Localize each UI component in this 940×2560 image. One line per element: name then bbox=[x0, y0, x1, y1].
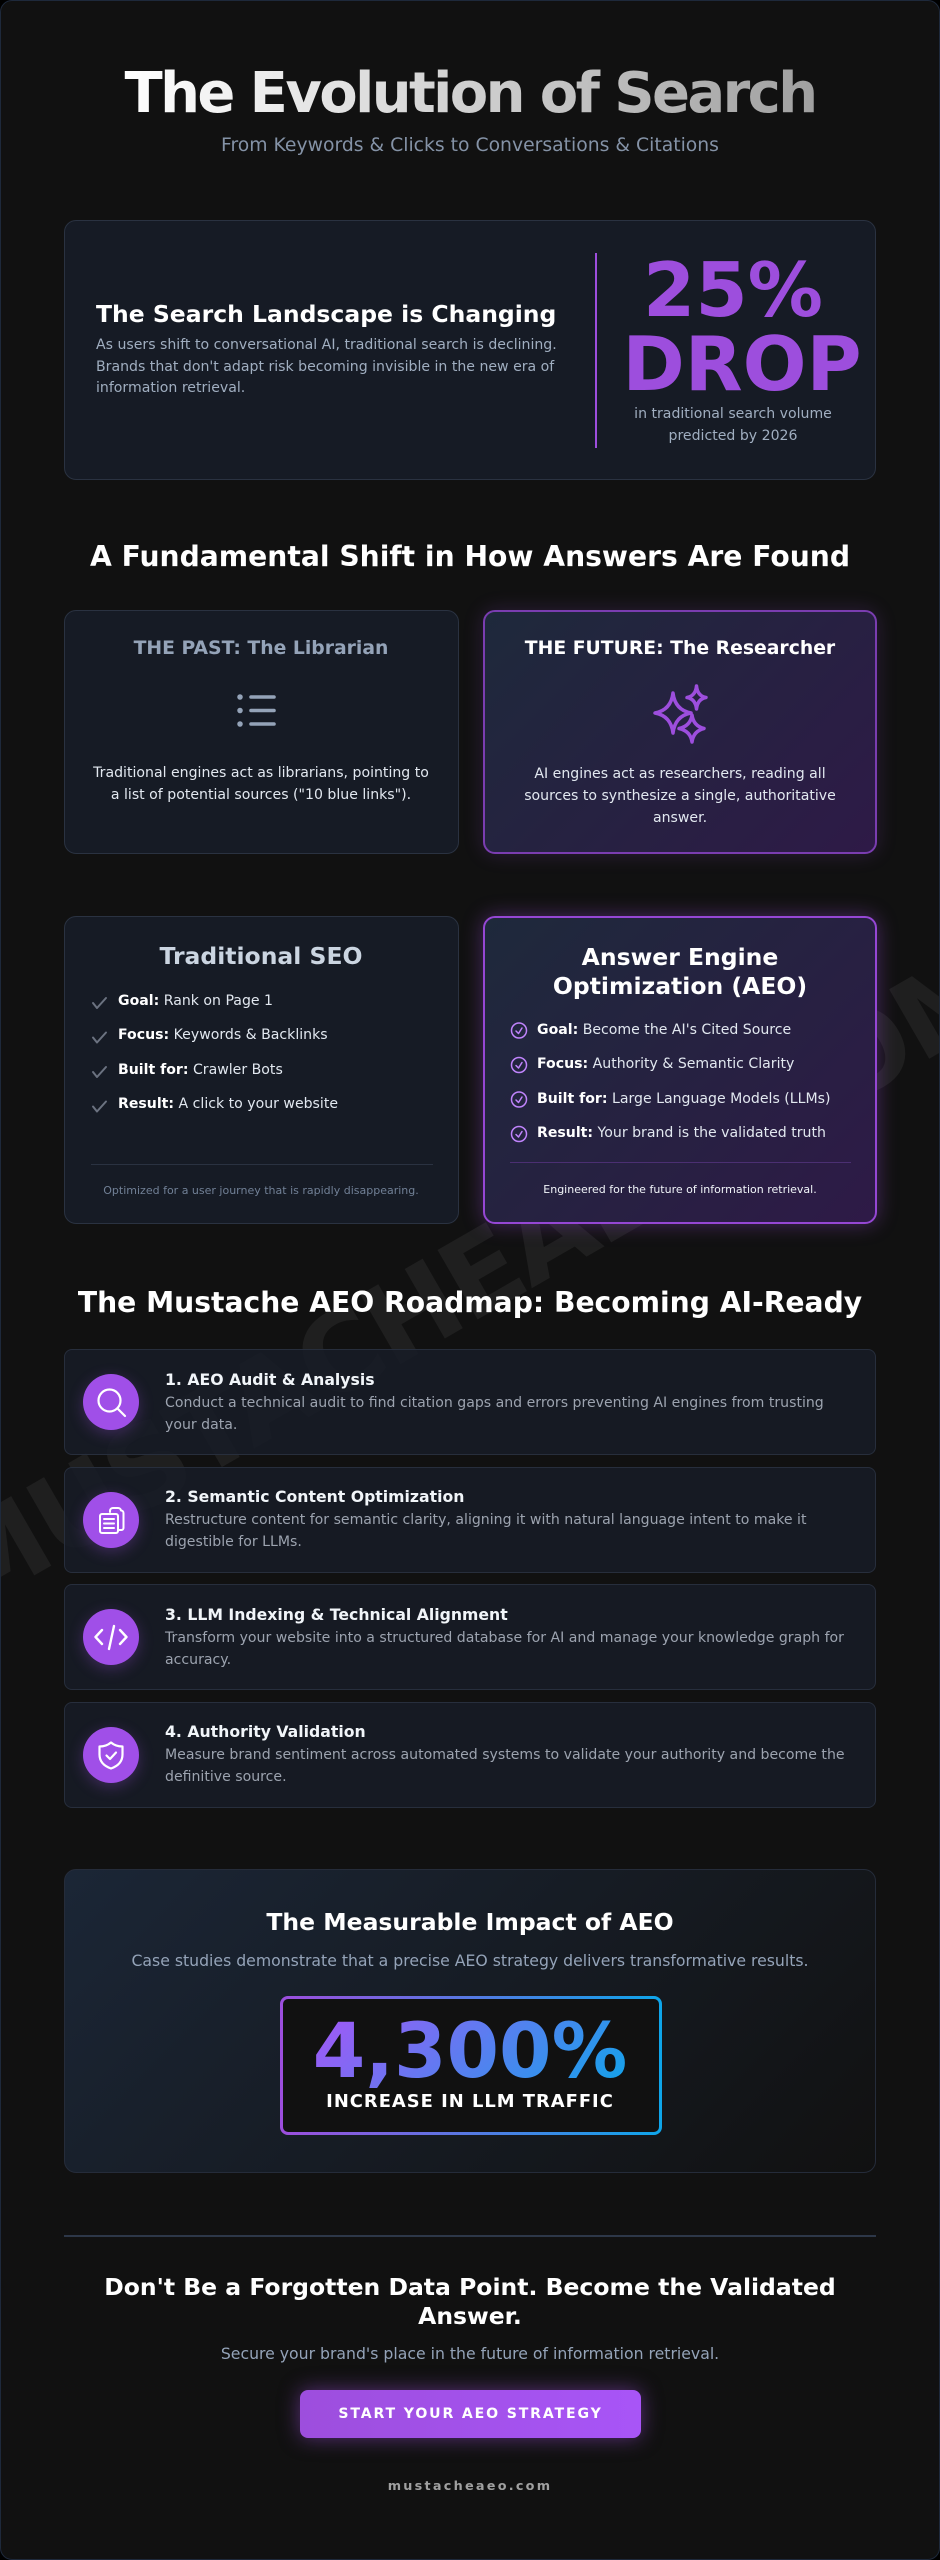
text: step 3 description: Transform your website into a structured database for AI and manage your knowledge graph for bbox=[165, 1630, 844, 1646]
divider line bbox=[91, 1164, 433, 1165]
text: past: Traditional engines act as librarians, pointing to bbox=[93, 765, 429, 781]
list: AEO points bbox=[510, 1022, 830, 1142]
divider line bbox=[510, 1162, 851, 1163]
stat label: INCREASE IN LLM TRAFFIC bbox=[326, 2091, 614, 2112]
stat: 4,300%: 4,300% bbox=[313, 2007, 627, 2095]
icon: code bbox=[83, 1609, 139, 1665]
panel: roadmap step 1 bbox=[64, 1349, 876, 1455]
text: step 2 description: Restructure content for semantic clarity, aligning it with natural language intent to make it bbox=[165, 1512, 806, 1528]
text: step 4 description: definitive source. bbox=[165, 1769, 287, 1785]
text: future: AI engines act as researchers, reading all bbox=[534, 766, 826, 782]
stat caption: in traditional search volume bbox=[634, 406, 832, 422]
text: step 1 description: your data. bbox=[165, 1417, 237, 1433]
panel: the past bbox=[64, 610, 459, 854]
text: AEO footer: Engineered for the future of information retrieval. bbox=[543, 1183, 817, 1196]
button: START YOUR AEO STRATEGY bbox=[338, 2406, 603, 2422]
list: SEO points: Goal: Rank on Page 1 bbox=[118, 993, 273, 1009]
icon: shield bbox=[83, 1727, 139, 1783]
heading: traditional SEO: Traditional SEO bbox=[160, 942, 362, 970]
list: SEO points: Focus: Keywords & Backlinks bbox=[118, 1027, 328, 1043]
stat: DROP: DROP bbox=[622, 320, 862, 408]
icon: sparkles bbox=[653, 684, 708, 744]
text: past bbox=[93, 765, 429, 803]
stat: 25%: 25% bbox=[643, 246, 823, 334]
heading: AEO: Answer Engine bbox=[582, 943, 778, 971]
text: step 2 description: digestible for LLMs. bbox=[165, 1534, 302, 1550]
text: step 3 description bbox=[164, 1630, 844, 1668]
stat caption: predicted by 2026 bbox=[668, 428, 797, 444]
text: landscape body: Brands that don't adapt risk becoming invisible in the new era of bbox=[96, 359, 554, 375]
text: step 3 description: accuracy. bbox=[165, 1652, 231, 1668]
list: AEO points: Focus: Authority & Semantic Clarity bbox=[537, 1056, 794, 1072]
subtitle: From Keywords & Clicks to Conversations & Citations bbox=[221, 135, 719, 156]
heading: past: THE PAST: The Librarian bbox=[134, 638, 388, 659]
text: step 1 title: 1. AEO Audit & Analysis bbox=[165, 1370, 375, 1389]
heading: roadmap: The Mustache AEO Roadmap: Becoming AI-Ready bbox=[78, 1286, 862, 1319]
panel: roadmap step 3 bbox=[64, 1584, 876, 1690]
heading: call to action bbox=[104, 2273, 836, 2330]
heading: impact: The Measurable Impact of AEO bbox=[266, 1908, 674, 1936]
text: step 1 description bbox=[165, 1395, 824, 1433]
text: step 4 title: 4. Authority Validation bbox=[165, 1722, 366, 1741]
text: step 1 description: Conduct a technical audit to find citation gaps and errors preventing AI engines from trusting bbox=[165, 1395, 824, 1411]
button bbox=[300, 2390, 641, 2438]
panel: the future bbox=[483, 610, 877, 854]
list: AEO points: Built for: Large Language Models (LLMs) bbox=[537, 1091, 830, 1107]
title: The Evolution of Search bbox=[125, 61, 815, 126]
heading: fundamental shift: A Fundamental Shift in How Answers Are Found bbox=[90, 540, 850, 573]
icon: clipboards bbox=[83, 1492, 139, 1548]
stat box bbox=[280, 1996, 662, 2135]
list: SEO points: Built for: Crawler Bots bbox=[118, 1062, 283, 1078]
text: step 4 description: Measure brand sentiment across automated systems to validate your authority and become the bbox=[165, 1747, 845, 1763]
text: future bbox=[524, 766, 836, 826]
divider line bbox=[595, 253, 597, 448]
heading: landscape: The Search Landscape is Changing bbox=[96, 300, 556, 328]
panel: roadmap step 2 bbox=[64, 1467, 876, 1573]
text: future: answer. bbox=[653, 810, 707, 826]
heading: AEO: Optimization (AEO) bbox=[553, 972, 807, 1000]
heading: AEO bbox=[553, 943, 807, 1000]
list: SEO points: Result: A click to your website bbox=[118, 1096, 338, 1112]
text: past: a list of potential sources ("10 blue links"). bbox=[111, 787, 411, 803]
text: future: sources to synthesize a single, authoritative bbox=[524, 788, 836, 804]
text: landscape body: information retrieval. bbox=[96, 380, 245, 396]
heading: call to action: Don't Be a Forgotten Data Point. Become the Validated bbox=[104, 2273, 836, 2301]
text: call to action: Secure your brand's place in the future of information retrieval. bbox=[221, 2344, 719, 2363]
text: step 2 title: 2. Semantic Content Optimization bbox=[165, 1487, 464, 1506]
stat caption bbox=[634, 406, 832, 444]
icon: search bbox=[83, 1374, 139, 1430]
panel: AEO bbox=[483, 916, 877, 1224]
divider line bbox=[64, 2235, 876, 2237]
heading: call to action: Answer. bbox=[418, 2302, 522, 2330]
panel: search landscape bbox=[64, 220, 876, 480]
panel: measurable impact bbox=[64, 1869, 876, 2173]
text: step 3 title: 3. LLM Indexing & Technical Alignment bbox=[165, 1605, 508, 1624]
panel: roadmap step 4 bbox=[64, 1702, 876, 1808]
text: step 2 description bbox=[165, 1512, 806, 1550]
text: impact body: Case studies demonstrate that a precise AEO strategy delivers transformative results. bbox=[131, 1951, 809, 1970]
list: AEO points: Result: Your brand is the validated truth bbox=[537, 1125, 826, 1141]
list: AEO points: Goal: Become the AI's Cited Source bbox=[537, 1022, 791, 1038]
heading: future: THE FUTURE: The Researcher bbox=[525, 638, 835, 659]
text: step 4 description bbox=[165, 1747, 845, 1785]
text: website: mustacheaeo.com bbox=[388, 2479, 552, 2494]
text: landscape body: As users shift to conversational AI, traditional search is declining. bbox=[96, 337, 557, 353]
panel: traditional SEO bbox=[64, 916, 459, 1224]
text: landscape body bbox=[96, 337, 557, 396]
text: SEO footer: Optimized for a user journey that is rapidly disappearing. bbox=[103, 1184, 419, 1197]
list: SEO points bbox=[92, 993, 338, 1112]
icon: list bbox=[237, 694, 276, 727]
